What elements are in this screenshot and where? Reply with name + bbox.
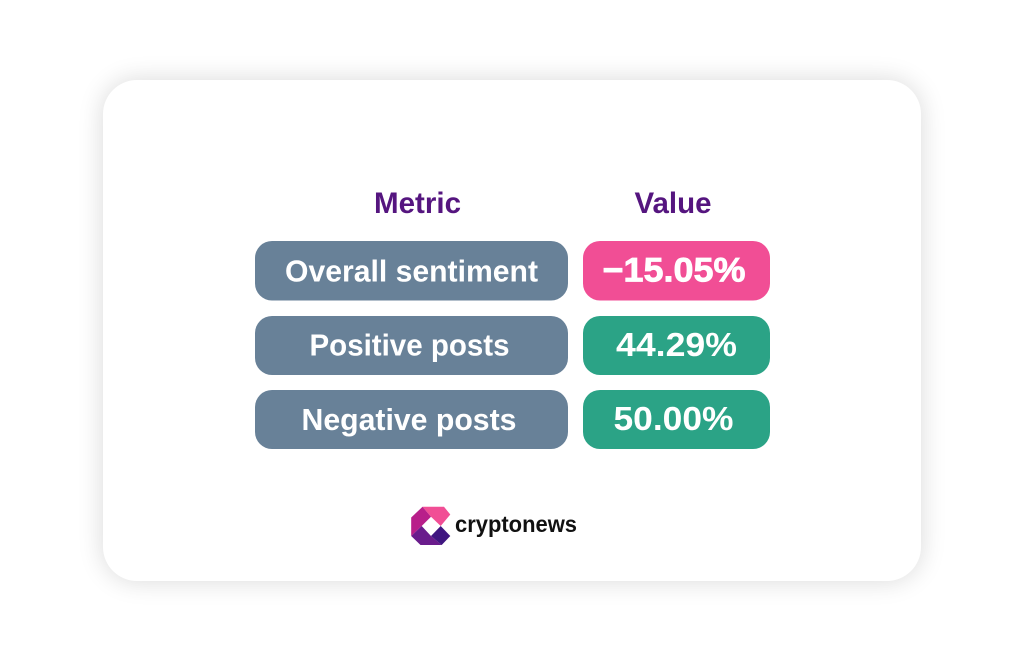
row: negative posts value: 50.00% <box>614 400 734 437</box>
row: positive posts value: 44.29% <box>616 326 737 363</box>
row: positive posts label: Positive posts <box>310 328 510 362</box>
row: overall sentiment label: Overall sentiment <box>285 254 538 288</box>
row: overall sentiment value <box>583 241 770 300</box>
row: overall sentiment value: −15.05% <box>602 252 746 290</box>
row: positive posts label <box>255 316 568 375</box>
logo: cryptonews <box>411 507 577 545</box>
row: negative posts label <box>255 390 568 449</box>
heading: Metric: Metric <box>374 187 461 220</box>
row: negative posts value <box>583 390 770 449</box>
row: negative posts label: Negative posts <box>302 402 516 437</box>
icon: cryptonews mark <box>411 507 450 545</box>
heading: Value: Value <box>634 187 712 220</box>
row: positive posts value <box>583 316 770 375</box>
panel: card <box>103 80 921 581</box>
row: overall sentiment label <box>255 241 568 300</box>
wordmark: cryptonews <box>455 511 577 537</box>
